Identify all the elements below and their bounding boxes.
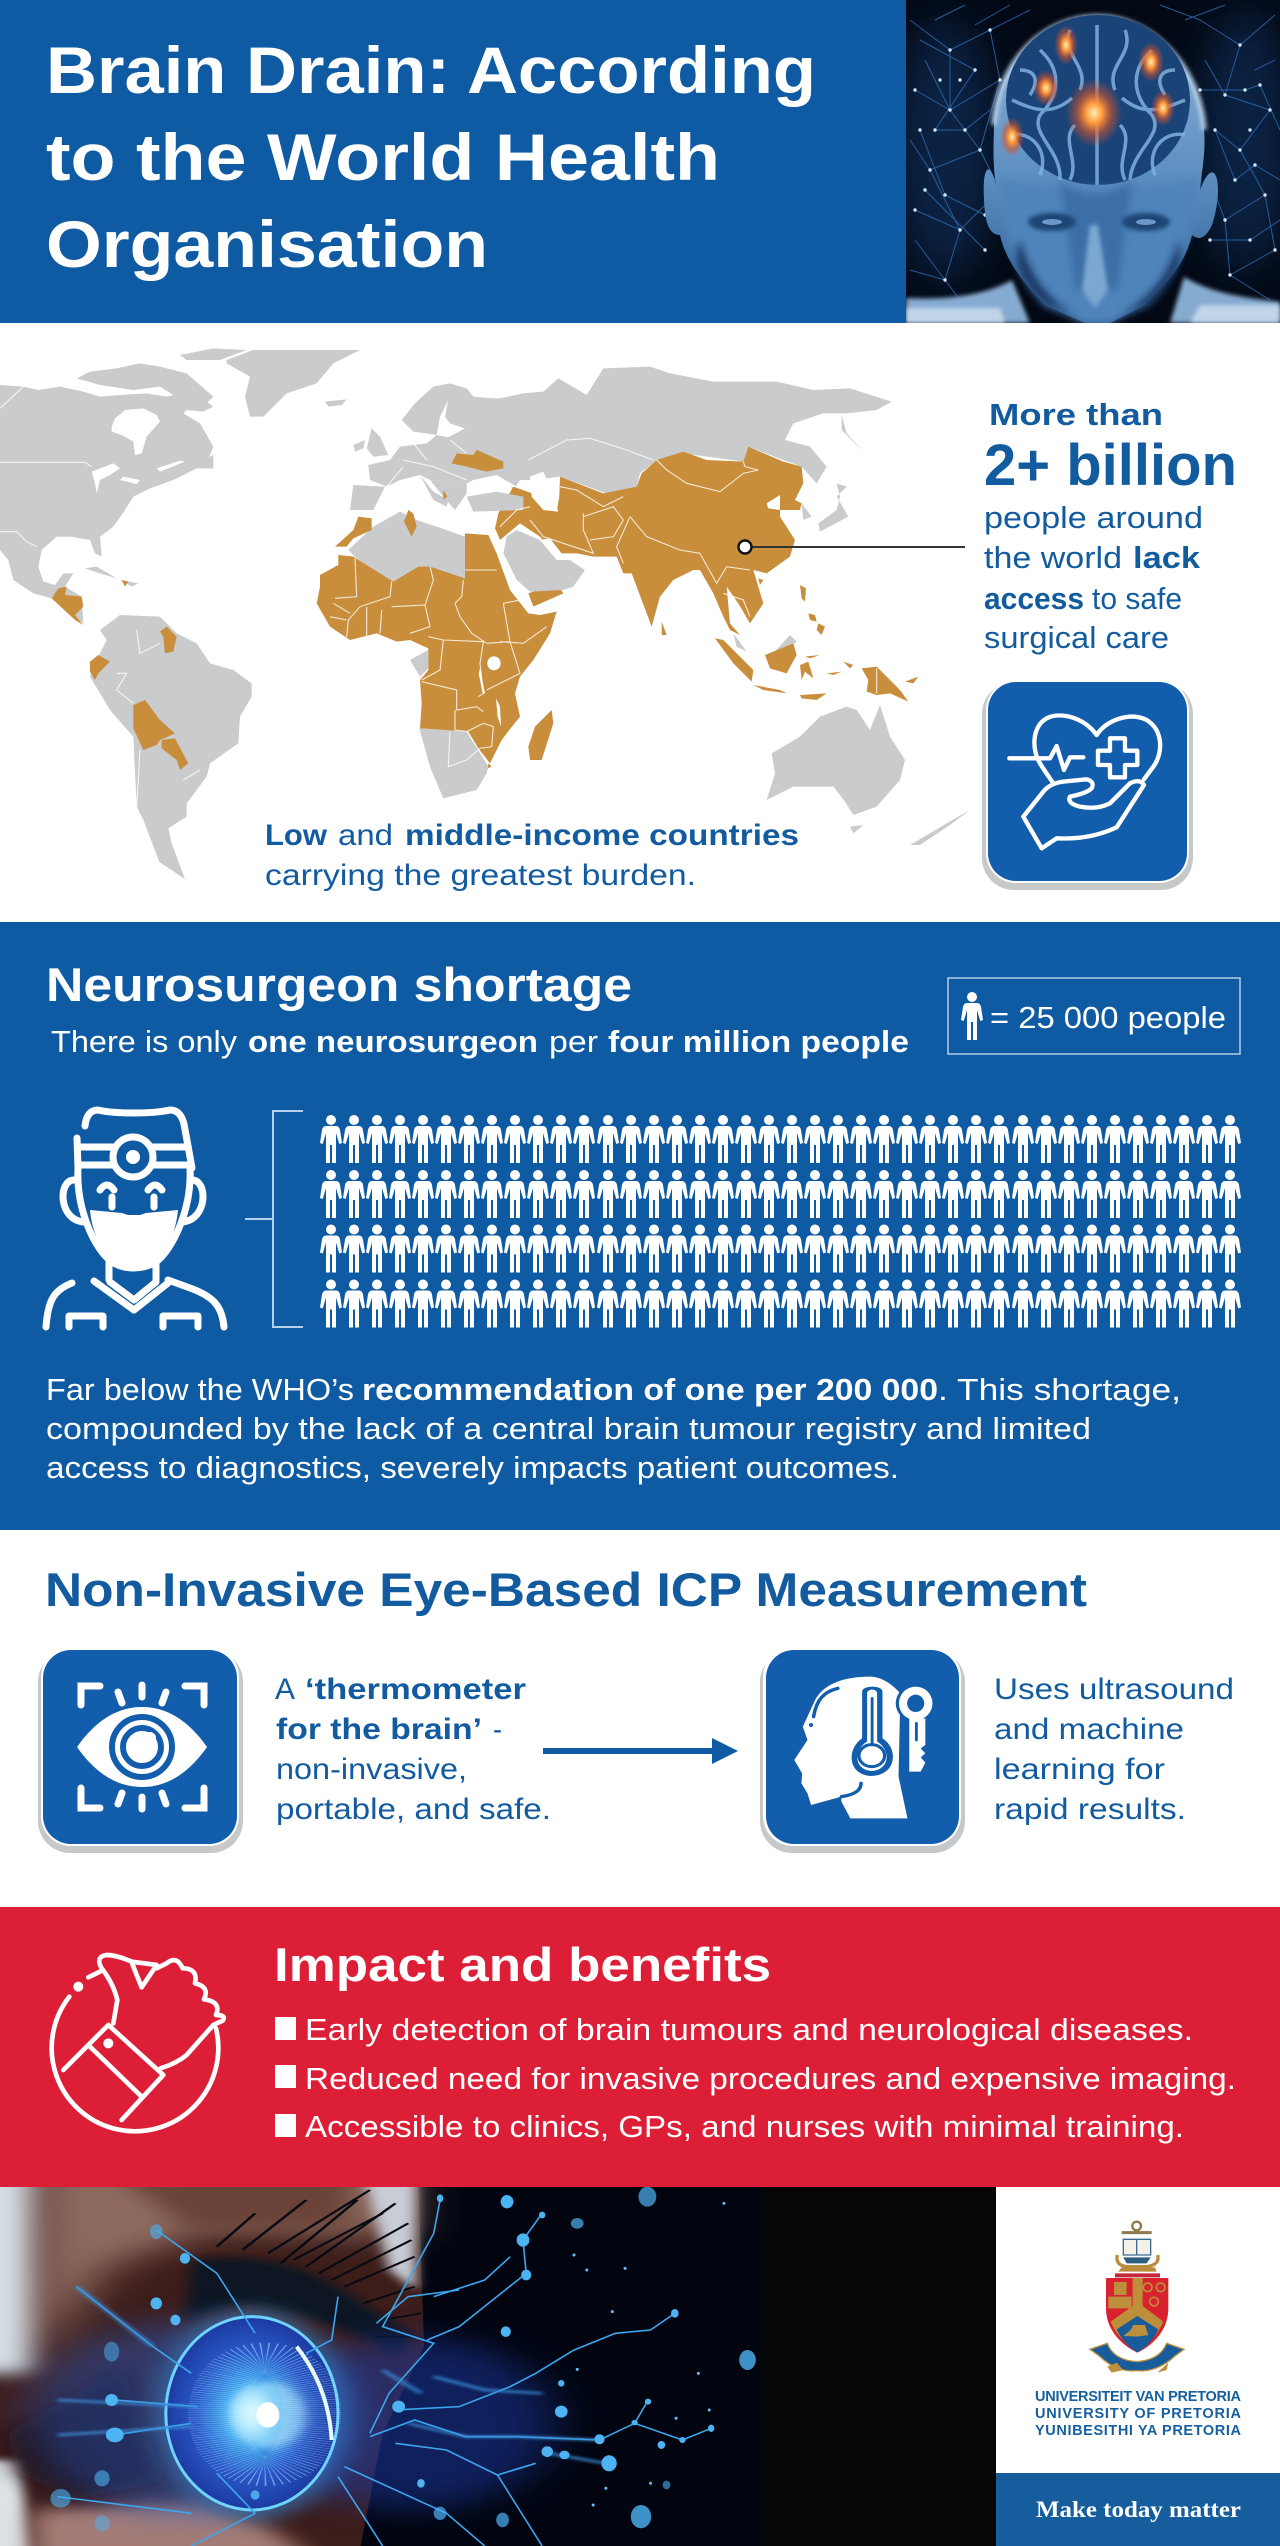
head: [984, 55, 1218, 323]
row 3 of figures: [320, 1224, 1241, 1272]
heading: Non-Invasive Eye-Based ICP Measurement: [45, 1563, 1087, 1616]
photo: glowing eye with neural network: [0, 2160, 996, 2546]
panel: university logo: [996, 2187, 1280, 2546]
icon: surgical mask fill: [90, 1210, 178, 1268]
photo: glowing brain head: [895, 0, 1280, 323]
list: benefits: Accessible to clinics, GPs, and nurses with minimal training.: [305, 2109, 1184, 2144]
statistic: more than 2+ billion: to safe: [1092, 581, 1182, 616]
text: thermometer for the brain: -: [493, 1713, 502, 1746]
text: ultrasound and machine learning: Uses ultrasound: [994, 1673, 1234, 1706]
row 4 of figures: [320, 1280, 1241, 1328]
paragraph: WHO recommendation: access to diagnostics, severely impacts patient outcomes.: [46, 1450, 899, 1485]
subheading: four million people: [608, 1024, 909, 1059]
tagline band: Make today matter: [1036, 2497, 1241, 2522]
face: [1000, 178, 1197, 323]
subheading: one neurosurgeon: [248, 1024, 538, 1059]
row 1 of figures: [320, 1115, 1241, 1163]
statistic: more than 2+ billion: access: [984, 581, 1084, 616]
paragraph: WHO recommendation: Far below the WHO’s: [46, 1372, 354, 1407]
university name: YUNIBESITHI YA PRETORIA: [1035, 2423, 1242, 2439]
map caption: Low: [265, 819, 328, 852]
heading: Impact and benefits: [274, 1938, 771, 1991]
text: thermometer for the brain: A: [275, 1673, 295, 1706]
paragraph: WHO recommendation: recommendation of one per 200 000: [362, 1372, 938, 1407]
list: benefits: Early detection of brain tumours and neurological diseases.: [305, 2012, 1193, 2047]
text: thermometer for the brain: portable, and safe.: [276, 1793, 551, 1826]
panel: world map: [0, 348, 1234, 891]
icon: thumbs up in circle: [52, 1955, 224, 2131]
map caption: middle-income countries: [405, 819, 799, 852]
panel: impact and benefits: [0, 1907, 1280, 2187]
icon: eye scan: [38, 1647, 243, 1853]
subheading: There is only: [51, 1024, 238, 1059]
university name: [1035, 2389, 1242, 2439]
pictogram grid: 160 figures: [320, 1115, 1241, 1328]
map caption: [265, 819, 799, 892]
callout pointer from map to statistic: [738, 540, 965, 554]
statistic: more than 2+ billion: the world: [984, 540, 1122, 575]
title: to the World Health: [46, 120, 720, 194]
statistic: more than 2+ billion: people around: [984, 500, 1203, 535]
paragraph: WHO recommendation: compounded by the lack of a central brain tumour registry and limited: [46, 1411, 1091, 1446]
icon: head with thermometer: [760, 1647, 965, 1853]
text: ultrasound and machine learning: [994, 1673, 1234, 1826]
paragraph: WHO recommendation: . This shortage,: [938, 1372, 1181, 1407]
crest: [1090, 2222, 1184, 2373]
statistic: more than 2+ billion: More than: [989, 397, 1163, 432]
list: benefits: [275, 2012, 1236, 2144]
statistic: more than 2+ billion: surgical care: [984, 620, 1169, 655]
map caption: carrying the greatest burden.: [265, 859, 696, 892]
university name: UNIVERSITEIT VAN PRETORIA: [1035, 2389, 1242, 2405]
icon: neurosurgeon with head mirror and mask: [46, 1110, 224, 1327]
brain: [1006, 15, 1190, 185]
title: Organisation: [46, 207, 488, 281]
bracket: [245, 1111, 303, 1327]
subheading: [51, 1024, 909, 1059]
statistic: more than 2+ billion: [984, 397, 1237, 655]
title: Brain Drain: According: [46, 33, 816, 107]
arrow: [543, 1738, 738, 1764]
statistic: more than 2+ billion: 2+ billion: [984, 433, 1237, 498]
statistic: more than 2+ billion: lack: [1133, 540, 1201, 575]
text: ultrasound and machine learning: and machine: [994, 1713, 1184, 1746]
heading: Neurosurgeon shortage: [46, 958, 632, 1011]
icon: heart in hand: [982, 680, 1193, 890]
header band: [0, 0, 1280, 323]
panel: eye-based ICP measurement: [0, 1530, 1280, 1907]
text: thermometer for the brain: for the brain’: [276, 1713, 482, 1746]
title: [46, 33, 816, 281]
text: thermometer for the brain: non-invasive,: [276, 1753, 467, 1786]
text: thermometer for the brain: [275, 1673, 551, 1826]
text: ultrasound and machine learning: rapid results.: [994, 1793, 1186, 1826]
list: benefits: Reduced need for invasive procedures and expensive imaging.: [305, 2061, 1236, 2096]
legend: one figure equals 25 000 people: [948, 978, 1240, 1054]
university name: UNIVERSITY OF PRETORIA: [1035, 2406, 1242, 2422]
row 2 of figures: [320, 1170, 1241, 1218]
tagline band: [996, 2473, 1280, 2546]
subheading: per: [549, 1024, 598, 1059]
map caption: and: [338, 819, 393, 852]
text: thermometer for the brain: ‘thermometer: [305, 1673, 526, 1706]
legend: one figure equals 25 000 people: = 25 000 people: [990, 1000, 1226, 1035]
paragraph: WHO recommendation: [46, 1372, 1181, 1485]
text: ultrasound and machine learning: learning for: [994, 1753, 1165, 1786]
shoulders: [906, 277, 1280, 323]
panel: neurosurgeon shortage: [0, 922, 1280, 1530]
map: low and middle-income countries highlighted: [0, 348, 970, 879]
